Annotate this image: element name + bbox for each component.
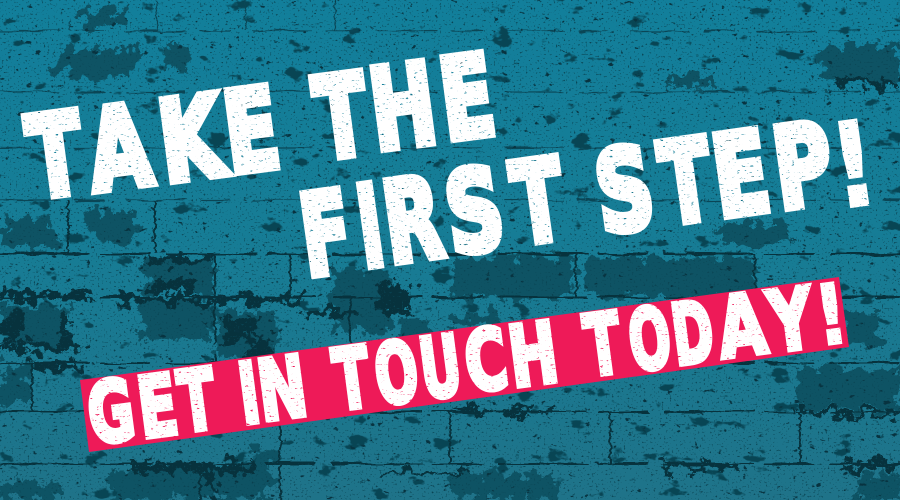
banner text: GET IN TOUCH TODAY! [82,266,854,464]
heading: FIRST STEP!: I [350,161,391,294]
heading: FIRST STEP!: P [765,98,841,235]
banner text: GET IN TOUCH TODAY!: C [459,309,513,412]
mortar lines: upper wall [0,0,900,200]
callout: pink banner [80,266,854,464]
banner text: GET IN TOUCH TODAY!: H [503,305,564,408]
heading: TAKE THE: T [308,51,375,186]
mortar lines: lower wall [0,200,900,500]
heading: FIRST STEP! [293,94,886,303]
banner text: GET IN TOUCH TODAY!: I [233,345,265,444]
heading: TAKE THE: E [216,63,287,199]
heading: FIRST STEP!: T [653,115,720,251]
banner text: GET IN TOUCH TODAY!: ! [809,266,854,366]
banner text: GET IN TOUCH TODAY!: G [82,361,140,464]
heading: TAKE THE [20,30,502,224]
heading: FIRST STEP!: S [437,143,512,280]
heading: FIRST STEP!: S [587,122,662,259]
banner text: GET IN TOUCH TODAY!: N [252,339,313,442]
heading: FIRST STEP!: E [705,107,777,244]
banner text: GET IN TOUCH TODAY!: T [328,329,376,430]
banner text: GET IN TOUCH TODAY!: D [666,284,719,386]
heading: TAKE THE: H [362,39,444,177]
heading: TAKE THE: K [152,71,233,209]
banner text: GET IN TOUCH TODAY!: O [623,289,677,392]
banner text: GET IN TOUCH TODAY!: T [173,350,222,452]
heading: FIRST STEP!: ! [822,94,886,237]
banner text: GET IN TOUCH TODAY!: Y [762,270,820,373]
banner text: GET IN TOUCH TODAY!: O [369,324,424,425]
heading: TAKE THE: E [432,30,502,167]
banner text: GET IN TOUCH TODAY!: T [579,295,627,396]
heading: FIRST STEP!: T [505,135,572,271]
heading: FIRST STEP!: R [376,153,450,290]
heading: TAKE THE: T [20,88,91,224]
heading: FIRST STEP!: F [293,168,359,303]
banner text: GET IN TOUCH TODAY!: U [414,318,467,419]
heading: TAKE THE: A [80,80,158,217]
banner text: GET IN TOUCH TODAY!: E [132,355,183,458]
banner text: GET IN TOUCH TODAY!: A [712,276,772,378]
